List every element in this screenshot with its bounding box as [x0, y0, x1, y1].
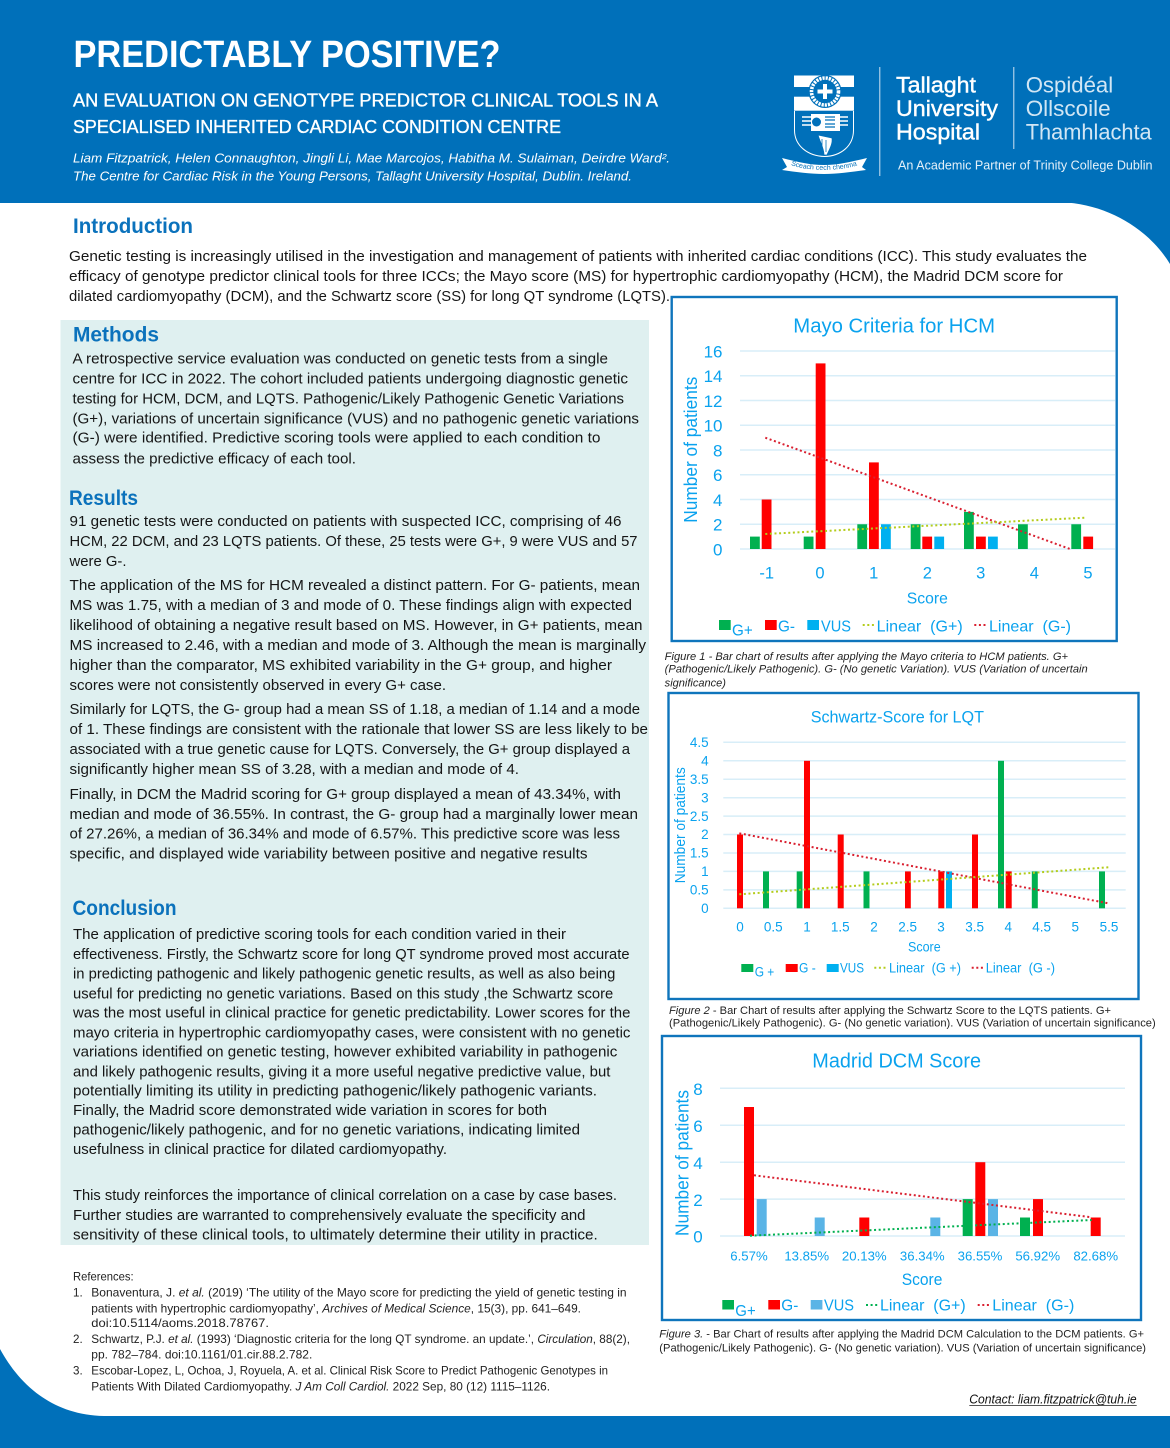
- legend: G+: [735, 1303, 756, 1320]
- text: conclusion: pathogenic/likely pathogenic, and for no genetic variations, indicating limited: [73, 1122, 580, 1138]
- legend: Linear (G+): [877, 619, 963, 636]
- y axis labels: 3.5: [690, 772, 709, 787]
- x axis labels: 6.57%: [730, 1249, 768, 1264]
- text: results: MS increased to 2.46, with a median and mode of 3. Although the mean is marginally: [70, 638, 647, 654]
- y axis labels: 4.5: [690, 735, 709, 750]
- hospital name: Irish: Thamhlachta: [1026, 119, 1152, 144]
- text: conclusion: mayo criteria in hypertrophic cardiomyopathy cases, were consistent with no genetic: [73, 1025, 631, 1041]
- x axis labels: 3.5: [965, 920, 984, 935]
- legend: G-: [778, 619, 795, 636]
- y axis title: Number of patients: [681, 377, 701, 523]
- bars: VUS: [757, 1199, 998, 1236]
- subtitle: SPECIALISED INHERITED CARDIAC CONDITION CENTRE: [73, 117, 561, 137]
- text: introduction: [69, 249, 1087, 305]
- y axis title: Number of patients: [673, 767, 689, 883]
- text: results: were G-.: [68, 554, 126, 570]
- heading: Results: Results: [69, 487, 138, 510]
- text: conclusion: The application of predictive scoring tools for each condition varied in their: [73, 927, 566, 943]
- authors and affiliation: [73, 150, 670, 184]
- x axis labels: 13.85%: [784, 1249, 829, 1264]
- x axis labels: [736, 920, 1118, 935]
- text: results: of 1. These findings are consistent with the rationale that lower SS are less likely to be: [70, 722, 648, 738]
- text: conclusion: usefulness in clinical practice for dilated cardiomyopathy.: [73, 1142, 447, 1158]
- bars: VUS: [881, 524, 998, 549]
- text: conclusion: variations identified on genetic testing, however exhibited variability in pathogenic: [73, 1044, 618, 1060]
- subtitle: AN EVALUATION ON GENOTYPE PREDICTOR CLINICAL TOOLS IN A: [73, 90, 658, 110]
- legend: Linear (G-): [992, 1298, 1074, 1315]
- text: conclusion: and likely pathogenic results, giving it a more useful negative predictive value, but: [73, 1064, 610, 1080]
- bars: G-: [762, 363, 1093, 549]
- references: Patients With Dilated Cardiomyopathy. J Am Coll Cardiol. 2022 Sep, 80 (12) 1115–1126.: [91, 1381, 550, 1394]
- x axis labels: 36.55%: [958, 1249, 1003, 1264]
- text: results: The application of the MS for HCM revealed a distinct pattern. For G- patients, mean: [70, 578, 640, 594]
- text: conclusion: in predicting pathogenic and likely pathogenic genetic results, as well as also being: [73, 966, 615, 982]
- legend: VUS: [824, 1298, 854, 1315]
- x axis labels: 3: [976, 564, 985, 582]
- x axis title: Score: [908, 940, 941, 955]
- text: conclusion: This study reinforces the importance of clinical correlation on a case by case bases.: [73, 1188, 617, 1204]
- bars: G+: [750, 512, 1081, 549]
- bars: G-: [744, 1107, 1101, 1236]
- x axis labels: 0.5: [764, 920, 783, 935]
- references: 1.: [73, 1287, 83, 1300]
- logo dividers: [879, 67, 1014, 176]
- bars: G+: [963, 1199, 1030, 1236]
- y axis title: Number of patients: [672, 1090, 692, 1236]
- hospital name: English: [896, 73, 999, 144]
- text: results: associated with a true genetic cause for LQTS. Conversely, the G+ group displayed a: [70, 742, 631, 758]
- authors and affiliation: Liam Fitzpatrick, Helen Connaughton, Jingli Li, Mae Marcojos, Habitha M. Sulaiman, Deirdre Ward².: [73, 150, 670, 166]
- y axis labels: 12: [704, 392, 722, 411]
- panel: methods, results and conclusion: [60, 320, 649, 1245]
- y axis labels: [693, 1080, 703, 1247]
- references: pp. 782–784. doi:10.1161/01.cir.88.2.782.: [91, 1349, 312, 1362]
- x axis labels: -1: [759, 564, 774, 582]
- text: results: significantly higher mean SS of 3.28, with a median and mode of 4.: [70, 762, 519, 778]
- heading: Introduction: Introduction: [73, 215, 193, 238]
- trendline: G-: [739, 833, 1108, 903]
- hospital name: English: University: [896, 96, 999, 121]
- references: Schwartz, P.J. et al. (1993) ‘Diagnostic criteria for the long QT syndrome. an update.’, Circulation, 88(2),: [91, 1333, 630, 1346]
- text: results: higher than the comparator, MS exhibited variability in the G+ group, and higher: [70, 658, 612, 674]
- caption: figure 2: [669, 1005, 1156, 1030]
- icon: hospital crest: Sceach cech chenmaí: [792, 161, 858, 170]
- x axis labels: 1.5: [831, 920, 850, 935]
- legend: G+: [732, 623, 753, 640]
- x axis labels: 82.68%: [1073, 1249, 1118, 1264]
- bars: G+: [763, 761, 1105, 908]
- authors and affiliation: The Centre for Cardiac Risk in the Young Persons, Tallaght University Hospital, Dublin. Ireland.: [73, 168, 632, 184]
- references: 3.: [73, 1364, 83, 1377]
- chart title: Madrid DCM Score: [812, 1051, 981, 1073]
- x axis labels: [730, 1249, 1118, 1264]
- title: PREDICTABLY POSITIVE?: [74, 34, 500, 76]
- x axis labels: 0: [736, 920, 744, 935]
- text: results: MS was 1.75, with a median of 3 and mode of 0. These findings align with expected: [70, 598, 632, 614]
- legend: VUS: [821, 619, 851, 636]
- caption: figure 1: [665, 651, 1088, 690]
- text: methods: (G-) were identified. Predictive scoring tools were applied to each condition to: [72, 430, 600, 446]
- references: doi:10.5114/aoms.2018.78767.: [91, 1317, 269, 1330]
- panel: chart 3 Madrid DCM score: [662, 1036, 1141, 1320]
- y axis labels: 16: [704, 342, 722, 362]
- legend: [741, 961, 1055, 980]
- legend: Linear (G +): [889, 961, 961, 976]
- text: conclusion: potentially limiting its utility in predicting pathogenic/likely pathogenic variants.: [73, 1083, 597, 1099]
- y axis labels: 6: [713, 466, 722, 485]
- y axis labels: 0.5: [690, 883, 709, 898]
- caption: figure 3: (Pathogenic/Likely Pathogenic). G- (No genetic variation). VUS (Variation of uncertain significance): [659, 1343, 1146, 1355]
- text: results: median and mode of 36.55%. In contrast, the G- group had a marginally lower mean: [70, 807, 638, 823]
- y axis labels: 2: [713, 516, 722, 535]
- y axis labels: 1: [701, 864, 709, 879]
- panel: chart 2 Schwartz score: [668, 693, 1138, 999]
- legend: [719, 619, 1071, 640]
- text: introduction: Genetic testing is increasingly utilised in the investigation and management of patients with inherited cardiac conditions (ICC). This study evaluates the: [69, 249, 1087, 265]
- y axis labels: 8: [713, 442, 722, 460]
- y axis labels: 4: [713, 491, 722, 510]
- x axis labels: 36.34%: [900, 1249, 945, 1264]
- references: Bonaventura, J. et al. (2019) ‘The utility of the Mayo score for predicting the yield of genetic testing in: [91, 1287, 627, 1300]
- text: results: specific, and displayed wide variability between positive and negative results: [70, 846, 588, 862]
- header band: [0, 0, 1170, 264]
- x axis labels: 56.92%: [1015, 1249, 1060, 1264]
- panel: chart 1 Mayo criteria: [672, 297, 1117, 641]
- text: conclusion: effectiveness. Firstly, the Schwartz score for long QT syndrome proved most accurate: [73, 947, 630, 963]
- text: methods: testing for HCM, DCM, and LQTS. Pathogenic/Likely Pathogenic Genetic Variations: [72, 391, 624, 407]
- text: conclusion: Finally, the Madrid score demonstrated wide variation in scores for both: [73, 1103, 547, 1119]
- x axis labels: 5: [1083, 564, 1093, 582]
- y axis labels: 8: [693, 1080, 703, 1099]
- trendline: G+: [765, 518, 1085, 534]
- x axis labels: 2.5: [898, 920, 917, 935]
- y axis labels: 14: [704, 367, 722, 386]
- caption: figure 1: Figure 1 - Bar chart of results after applying the Mayo criteria to HCM patients. G+: [665, 651, 1068, 663]
- y axis labels: 0: [693, 1228, 703, 1247]
- x axis labels: [759, 564, 1093, 582]
- trendline: G-: [754, 1175, 1092, 1217]
- x axis labels: 1: [869, 564, 878, 582]
- bars: VUS: [946, 871, 952, 908]
- text: results: HCM, 22 DCM, and 23 LQTS patients. Of these, 25 tests were G+, 9 were VUS and 57: [70, 534, 638, 550]
- caption: figure 1: (Pathogenic/Likely Pathogenic). G- (No genetic Variation). VUS (Variation of uncertain: [665, 664, 1088, 676]
- references: patients with hypertrophic cardiomyopathy’, Archives of Medical Science , 15(3), pp. 641–649.: [91, 1302, 581, 1316]
- subtitle: [73, 90, 658, 137]
- text: conclusion: sensitivity of these clinical tools, to ultimately determine their utility in practice.: [73, 1227, 598, 1243]
- y axis labels: 0: [713, 540, 722, 560]
- x axis labels: 20.13%: [842, 1249, 887, 1264]
- heading: Methods: Methods: [73, 324, 159, 347]
- caption: figure 2: (Pathogenic/Likely Pathogenic). G- (No genetic variation). VUS (Variation of uncertain significance): [669, 1018, 1156, 1030]
- y axis labels: 1.5: [690, 846, 709, 861]
- hospital name: Irish: [1026, 73, 1152, 144]
- x axis labels: 5: [1072, 920, 1079, 935]
- x axis labels: 4: [1030, 564, 1039, 582]
- text: results: of 27.26%, a median of 36.34% and mode of 6.57%. This predictive score was less: [70, 826, 620, 842]
- text: methods: [72, 351, 639, 467]
- legend: G +: [755, 965, 774, 980]
- y axis labels: 2: [693, 1191, 703, 1210]
- hospital name: Irish: Ospidéal: [1026, 73, 1113, 98]
- text: introduction: dilated cardiomyopathy (DCM), and the Schwartz score (SS) for long QT syndrome (LQTS).: [69, 289, 670, 305]
- text: methods: (G+), variations of uncertain significance (VUS) and no pathogenic genetic variations: [72, 411, 639, 427]
- y axis labels: 2: [701, 827, 709, 842]
- footer band: [0, 1349, 1170, 1448]
- academic partner note: An Academic Partner of Trinity College Dublin: [898, 158, 1152, 172]
- hospital name: English: Hospital: [896, 119, 980, 144]
- trendline: G+: [739, 867, 1108, 894]
- x axis labels: 5.5: [1100, 920, 1118, 935]
- y axis labels: 4: [693, 1154, 703, 1173]
- contact: Contact: liam.fitzpatrick@tuh.ie: [969, 1392, 1137, 1406]
- text: conclusion: was the most useful in clinical practice for genetic predictability. Lower scores for the: [72, 1005, 630, 1021]
- trendline: G+: [750, 1220, 1092, 1236]
- x axis title: Score: [907, 590, 948, 607]
- legend: Linear (G+): [880, 1298, 966, 1315]
- references: References:: [73, 1270, 134, 1284]
- y axis labels: 6: [693, 1117, 703, 1136]
- legend: G -: [799, 961, 816, 976]
- legend: Linear (G-): [989, 619, 1071, 636]
- references: 2.: [73, 1333, 83, 1346]
- text: results: [68, 514, 648, 862]
- y axis labels: [690, 735, 709, 916]
- y axis labels: 4: [701, 754, 709, 768]
- legend: Linear (G -): [986, 961, 1055, 976]
- caption: figure 1: significance): [665, 678, 726, 690]
- hospital name: English: Tallaght: [896, 73, 977, 98]
- y axis labels: 3: [701, 790, 709, 805]
- text: conclusion: Further studies are warranted to comprehensively evaluate the specificity and: [73, 1208, 586, 1224]
- references: [73, 1270, 630, 1394]
- text: results: Finally, in DCM the Madrid scoring for G+ group displayed a mean of 43.34%, with: [70, 787, 621, 803]
- caption: figure 2: Figure 2 - Bar Chart of results after applying the Schwartz Score to the LQTS patients. G+: [669, 1005, 1111, 1017]
- text: methods: centre for ICC in 2022. The cohort included patients undergoing diagnostic genetic: [72, 371, 629, 387]
- legend: [722, 1298, 1074, 1320]
- x axis labels: 4: [1005, 920, 1013, 935]
- x axis labels: 2: [870, 920, 878, 935]
- trendline: G-: [765, 438, 1070, 549]
- chart title: Schwartz-Score for LQT: [811, 707, 984, 726]
- references: Escobar-Lopez, L, Ochoa, J, Royuela, A. et al. Clinical Risk Score to Predict Pathogenic Genotypes in: [91, 1364, 608, 1377]
- y axis labels: 2.5: [690, 809, 709, 824]
- text: results: Similarly for LQTS, the G- group had a mean SS of 1.18, a median of 1.14 and a mode: [70, 702, 640, 718]
- chart title: Mayo Criteria for HCM: [793, 316, 995, 338]
- legend: VUS: [840, 961, 864, 976]
- text: methods: assess the predictive efficacy of each tool.: [72, 451, 356, 467]
- x axis labels: 0: [815, 564, 825, 582]
- text: conclusion: useful for predicting no genetic variations. Based on this study ,the Schwartz score: [73, 986, 613, 1002]
- bars: G-: [737, 761, 1012, 908]
- y axis labels: 10: [704, 417, 722, 436]
- x axis labels: 2: [923, 564, 932, 582]
- y axis labels: 0: [701, 901, 709, 916]
- hospital name: Irish: Ollscoile: [1026, 96, 1111, 121]
- icon: hospital crest: [782, 76, 867, 174]
- text: introduction: efficacy of genotype predictor clinical tools for three ICCs; the Mayo score (MS) for hypertrophic cardiomyopathy (HCM), the Madrid DCM score for: [69, 269, 1063, 285]
- text: results: 91 genetic tests were conducted on patients with suspected ICC, comprising of 46: [70, 514, 622, 530]
- text: methods: A retrospective service evaluation was conducted on genetic tests from a single: [72, 351, 608, 367]
- text: conclusion: [72, 927, 631, 1243]
- legend: G-: [781, 1298, 798, 1315]
- y axis labels: [704, 342, 722, 560]
- caption: figure 3: [659, 1328, 1146, 1355]
- text: results: scores were not consistently observed in every G+ case.: [70, 678, 446, 694]
- caption: figure 3: Figure 3. - Bar Chart of results after applying the Madrid DCM Calculation to the DCM patients. G+: [659, 1328, 1144, 1340]
- x axis labels: 4.5: [1032, 920, 1051, 935]
- heading: Conclusion: Conclusion: [72, 897, 176, 920]
- text: results: likelihood of obtaining a negative result based on MS. However, in G+ patients, mean: [70, 618, 642, 634]
- x axis labels: 1: [803, 920, 811, 935]
- x axis labels: 3: [937, 920, 945, 935]
- x axis title: Score: [902, 1271, 942, 1289]
